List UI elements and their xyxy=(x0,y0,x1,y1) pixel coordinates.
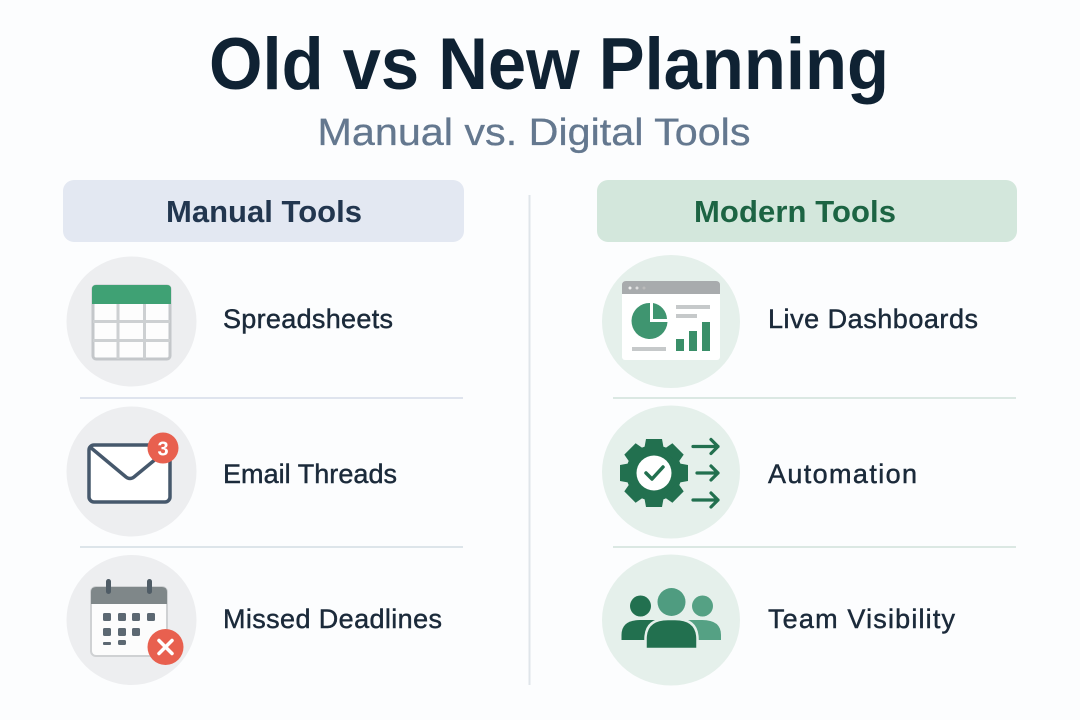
center divider xyxy=(528,195,530,685)
label: Email Threads: Email Threads xyxy=(223,459,397,489)
header: Manual Tools: Manual Tools xyxy=(166,194,362,229)
label: Team Visibility: Team Visibility xyxy=(768,604,956,634)
icon: email with badge xyxy=(66,406,196,536)
icon: email with badge: 3 xyxy=(157,438,169,460)
subtitle: Manual vs. Digital Tools xyxy=(318,112,750,154)
icon: spreadsheet xyxy=(66,256,196,386)
label: Automation: Automation xyxy=(768,459,917,489)
row dividers xyxy=(80,397,1016,548)
icon: calendar with missed mark xyxy=(66,555,196,685)
header: Modern Tools: Modern Tools xyxy=(694,194,896,229)
icon: dashboard xyxy=(602,255,740,388)
header: Manual Tools xyxy=(63,180,464,242)
icon: gear automation xyxy=(602,406,740,538)
label: Spreadsheets: Spreadsheets xyxy=(223,304,393,334)
label: Live Dashboards: Live Dashboards xyxy=(768,304,978,334)
header: Modern Tools xyxy=(597,180,1017,242)
icon: team xyxy=(602,554,740,686)
title: Old vs New Planning xyxy=(209,24,889,105)
label: Missed Deadlines: Missed Deadlines xyxy=(223,604,442,634)
